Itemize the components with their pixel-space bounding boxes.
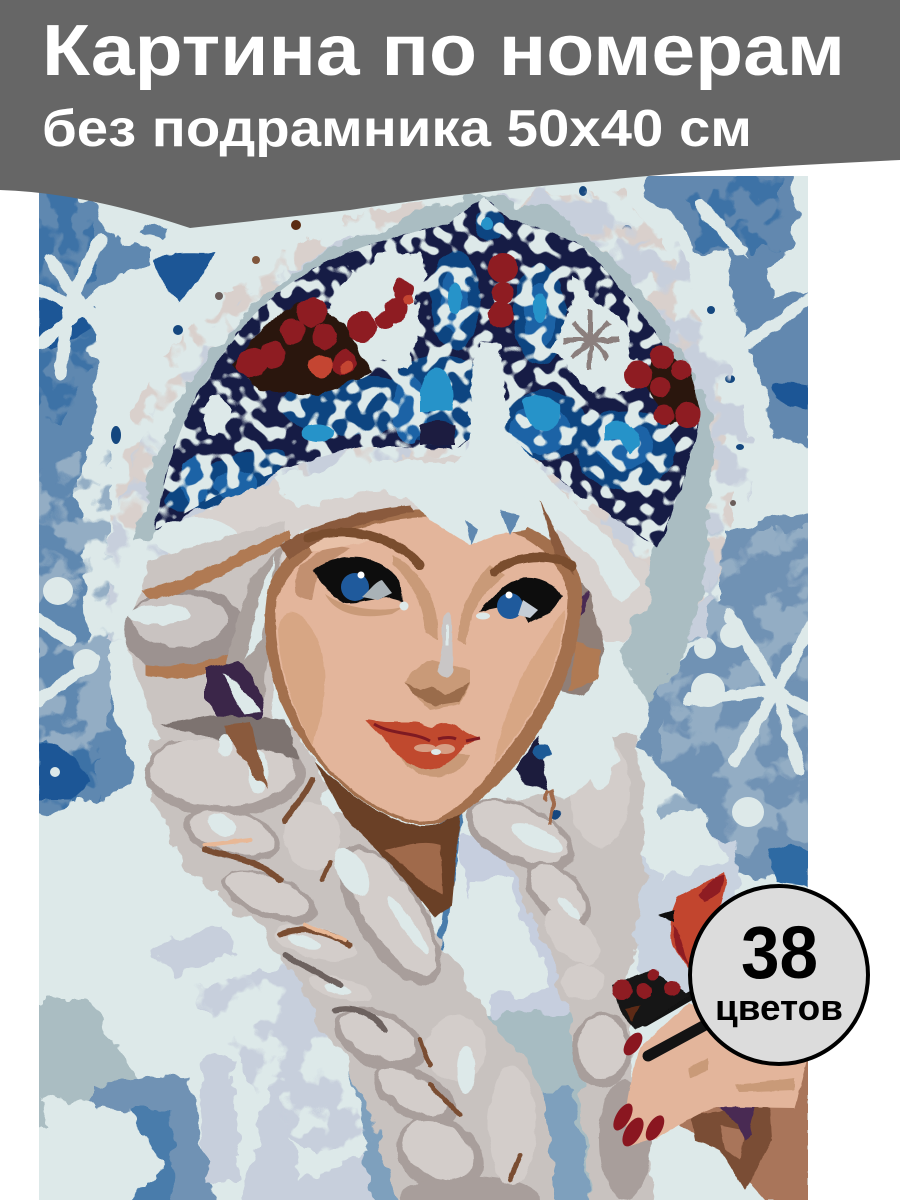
berries in hand [612, 969, 690, 1030]
hand with nails [609, 995, 807, 1150]
hair strands at forehead [406, 493, 528, 545]
badge: 38 colours [690, 886, 868, 1064]
grey ornament on crown [565, 310, 620, 370]
winter background with blue patches [39, 176, 808, 888]
bird [658, 873, 727, 968]
bright sky-blue gems [302, 218, 640, 455]
braid brown shadows [205, 780, 520, 1180]
braid highlights [204, 750, 475, 1094]
blue gems [157, 209, 675, 523]
header banner [0, 0, 900, 228]
dark snow flecks [111, 186, 744, 506]
white snow dots [43, 577, 764, 827]
lips [365, 719, 480, 777]
white snow speckle over crown [155, 197, 699, 547]
painting: Snow Maiden portrait [30, 170, 815, 1200]
halo of mist around the crown [103, 180, 760, 700]
fur hat brim and hair [124, 410, 655, 825]
crown (kokoshnik) [155, 197, 701, 547]
badge: 38 colours: 38 [741, 911, 818, 994]
arm [680, 1060, 808, 1200]
title: Картина по номерам [42, 11, 845, 91]
left braid [145, 725, 555, 1200]
red berries: left cluster [232, 279, 414, 395]
nose [404, 612, 470, 710]
left braid base mass [150, 725, 555, 1200]
left eye [313, 557, 408, 616]
fur collar and lower snow [30, 790, 740, 1200]
subtitle: без подрамника 50х40 см [42, 100, 752, 158]
snowflakes [39, 198, 808, 776]
red berries: centre [488, 253, 518, 328]
cheek shading [278, 465, 575, 765]
right braid [455, 730, 655, 1200]
right braid base mass [465, 730, 655, 1200]
hair strands, right of the face [515, 570, 620, 825]
face [265, 465, 582, 825]
eyebrows [308, 532, 572, 572]
red berries: right cluster [624, 345, 701, 428]
hair strands, left of the face [160, 540, 300, 790]
large white snow patches on crown [204, 251, 638, 445]
neck [314, 762, 463, 918]
right eye [476, 578, 562, 623]
hair bun, left [124, 520, 290, 740]
navy accents in the background [39, 252, 808, 886]
badge: 38 colours: цветов [715, 987, 843, 1028]
